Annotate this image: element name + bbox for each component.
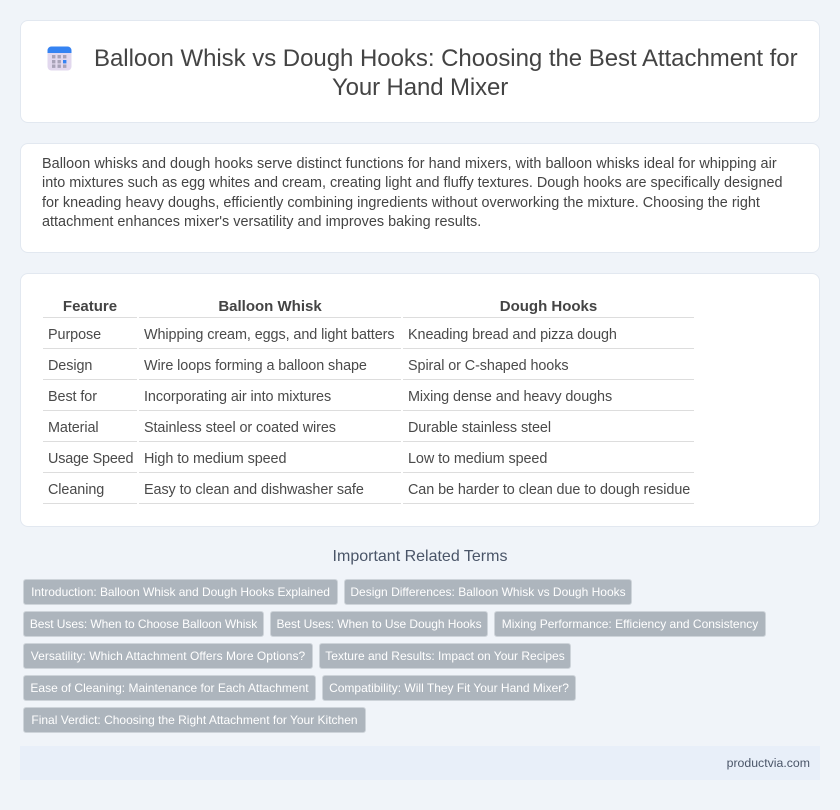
comparison table: Whipping cream, eggs, and light batters [144,327,394,343]
comparison table: Can be harder to clean due to dough residue [408,482,690,498]
related terms heading: Important Related Terms [333,548,507,565]
related terms tags: Design Differences: Balloon Whisk vs Dough Hooks [350,585,626,599]
comparison table: Kneading bread and pizza dough [408,327,617,343]
comparison table: Wire loops forming a balloon shape [144,358,367,374]
intro text: Balloon whisks and dough hooks serve distinct functions for hand mixers, with balloon whisks ideal for whipping air [42,156,777,172]
footer source: productvia.com [727,756,810,770]
comparison table: Balloon Whisk [218,298,322,315]
table card [20,273,820,527]
title [94,45,798,101]
intro text [42,156,782,230]
related terms tags: Introduction: Balloon Whisk and Dough Hooks Explained [31,585,330,599]
related terms tags: Best Uses: When to Use Dough Hooks [276,617,482,631]
comparison table: Best for [48,389,97,405]
comparison table: Incorporating air into mixtures [144,389,331,405]
comparison table: Dough Hooks [500,298,597,315]
related terms tags: Compatibility: Will They Fit Your Hand Mixer? [329,681,569,695]
comparison table: Mixing dense and heavy doughs [408,389,612,405]
comparison table: High to medium speed [144,451,286,467]
comparison table: Low to medium speed [408,451,547,467]
comparison table: Cleaning [48,482,104,498]
comparison table: Purpose [48,327,101,343]
comparison table: Durable stainless steel [408,420,551,436]
comparison table: Usage Speed [48,451,133,467]
comparison table: Material [48,420,99,436]
comparison table: Spiral or C-shaped hooks [408,358,568,374]
related terms tags [23,579,766,733]
related terms tags: Best Uses: When to Choose Balloon Whisk [30,617,257,631]
related terms tags: Final Verdict: Choosing the Right Attachment for Your Kitchen [31,713,358,727]
header card [20,20,820,123]
comparison table: Stainless steel or coated wires [144,420,336,436]
comparison table: Design [48,358,92,374]
intro text: for kneading heavy doughs, efficiently combining ingredients without overworking the mixture. Choosing the right [42,195,760,211]
comparison table: Easy to clean and dishwasher safe [144,482,364,498]
intro text: into mixtures such as egg whites and cream, creating light and fluffy textures. Dough hooks are specifically designed [42,175,782,191]
related terms tags: Versatility: Which Attachment Offers More Options? [31,649,305,663]
icon: calendar [48,46,72,70]
comparison table [43,298,694,504]
related terms tags: Mixing Performance: Efficiency and Consistency [502,617,758,631]
title: Balloon Whisk vs Dough Hooks: Choosing the Best Attachment for [94,45,798,72]
footer [20,746,820,780]
title: Your Hand Mixer [332,74,508,101]
related terms tags: Texture and Results: Impact on Your Recipes [325,649,565,663]
intro text: attachment enhances mixer's versatility and improves baking results. [42,214,481,230]
intro card [20,143,820,253]
comparison table: Feature [63,298,117,315]
related terms tags: Ease of Cleaning: Maintenance for Each Attachment [30,681,309,695]
